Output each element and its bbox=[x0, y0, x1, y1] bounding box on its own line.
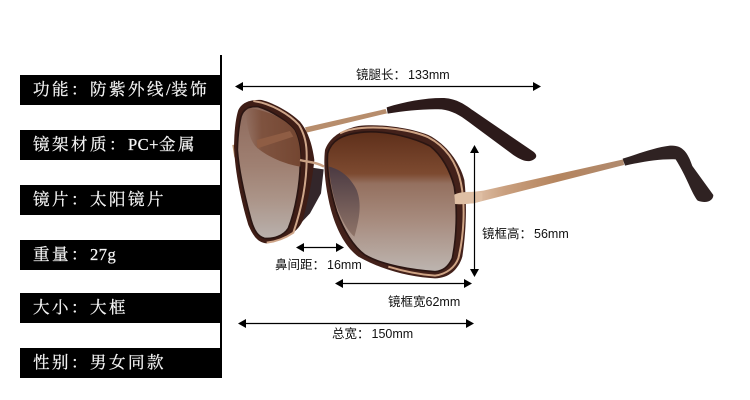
arrow: temple length bbox=[235, 82, 541, 91]
far temple arm bbox=[305, 98, 536, 161]
right lens frame bbox=[324, 125, 466, 278]
left lens bbox=[237, 107, 300, 239]
left lens frame bbox=[234, 100, 324, 243]
near temple arm bbox=[455, 146, 713, 204]
right hinge bbox=[454, 192, 482, 204]
arrow: total width bbox=[238, 319, 474, 328]
spec: function bbox=[20, 75, 221, 105]
glasses bbox=[232, 98, 713, 278]
spec: frame material bbox=[20, 130, 221, 160]
label: bridge width: 鼻间距：16mm bbox=[275, 257, 362, 272]
label: lens width: 镜框宽62mm bbox=[388, 294, 460, 309]
spec: weight: 重量：27g bbox=[33, 245, 116, 264]
spec: gender bbox=[20, 348, 221, 378]
arrow: lens height bbox=[470, 145, 479, 277]
label: temple length: 镜腿长：133mm bbox=[356, 67, 450, 82]
lens reflection bbox=[329, 167, 360, 237]
spec: gender: 性别：男女同款 bbox=[33, 353, 166, 372]
label: total width: 总宽：150mm bbox=[332, 326, 413, 341]
spec: function: 功能：防紫外线/装饰 bbox=[33, 80, 209, 99]
spec: lens: 镜片：太阳镜片 bbox=[33, 190, 166, 209]
spec: lens bbox=[20, 185, 221, 215]
spec: size: 大小：大框 bbox=[33, 298, 128, 317]
arrow: bridge width bbox=[296, 243, 344, 252]
label: lens height: 镜框高：56mm bbox=[482, 226, 569, 241]
left hinge bbox=[232, 144, 239, 158]
spec: size bbox=[20, 293, 221, 323]
spec: weight bbox=[20, 240, 221, 270]
bridge bbox=[300, 160, 324, 167]
divider line bbox=[220, 55, 222, 378]
arrow: lens width bbox=[335, 279, 472, 288]
right lens bbox=[327, 132, 456, 272]
spec: frame material: 镜架材质：PC+金属 bbox=[33, 135, 197, 154]
